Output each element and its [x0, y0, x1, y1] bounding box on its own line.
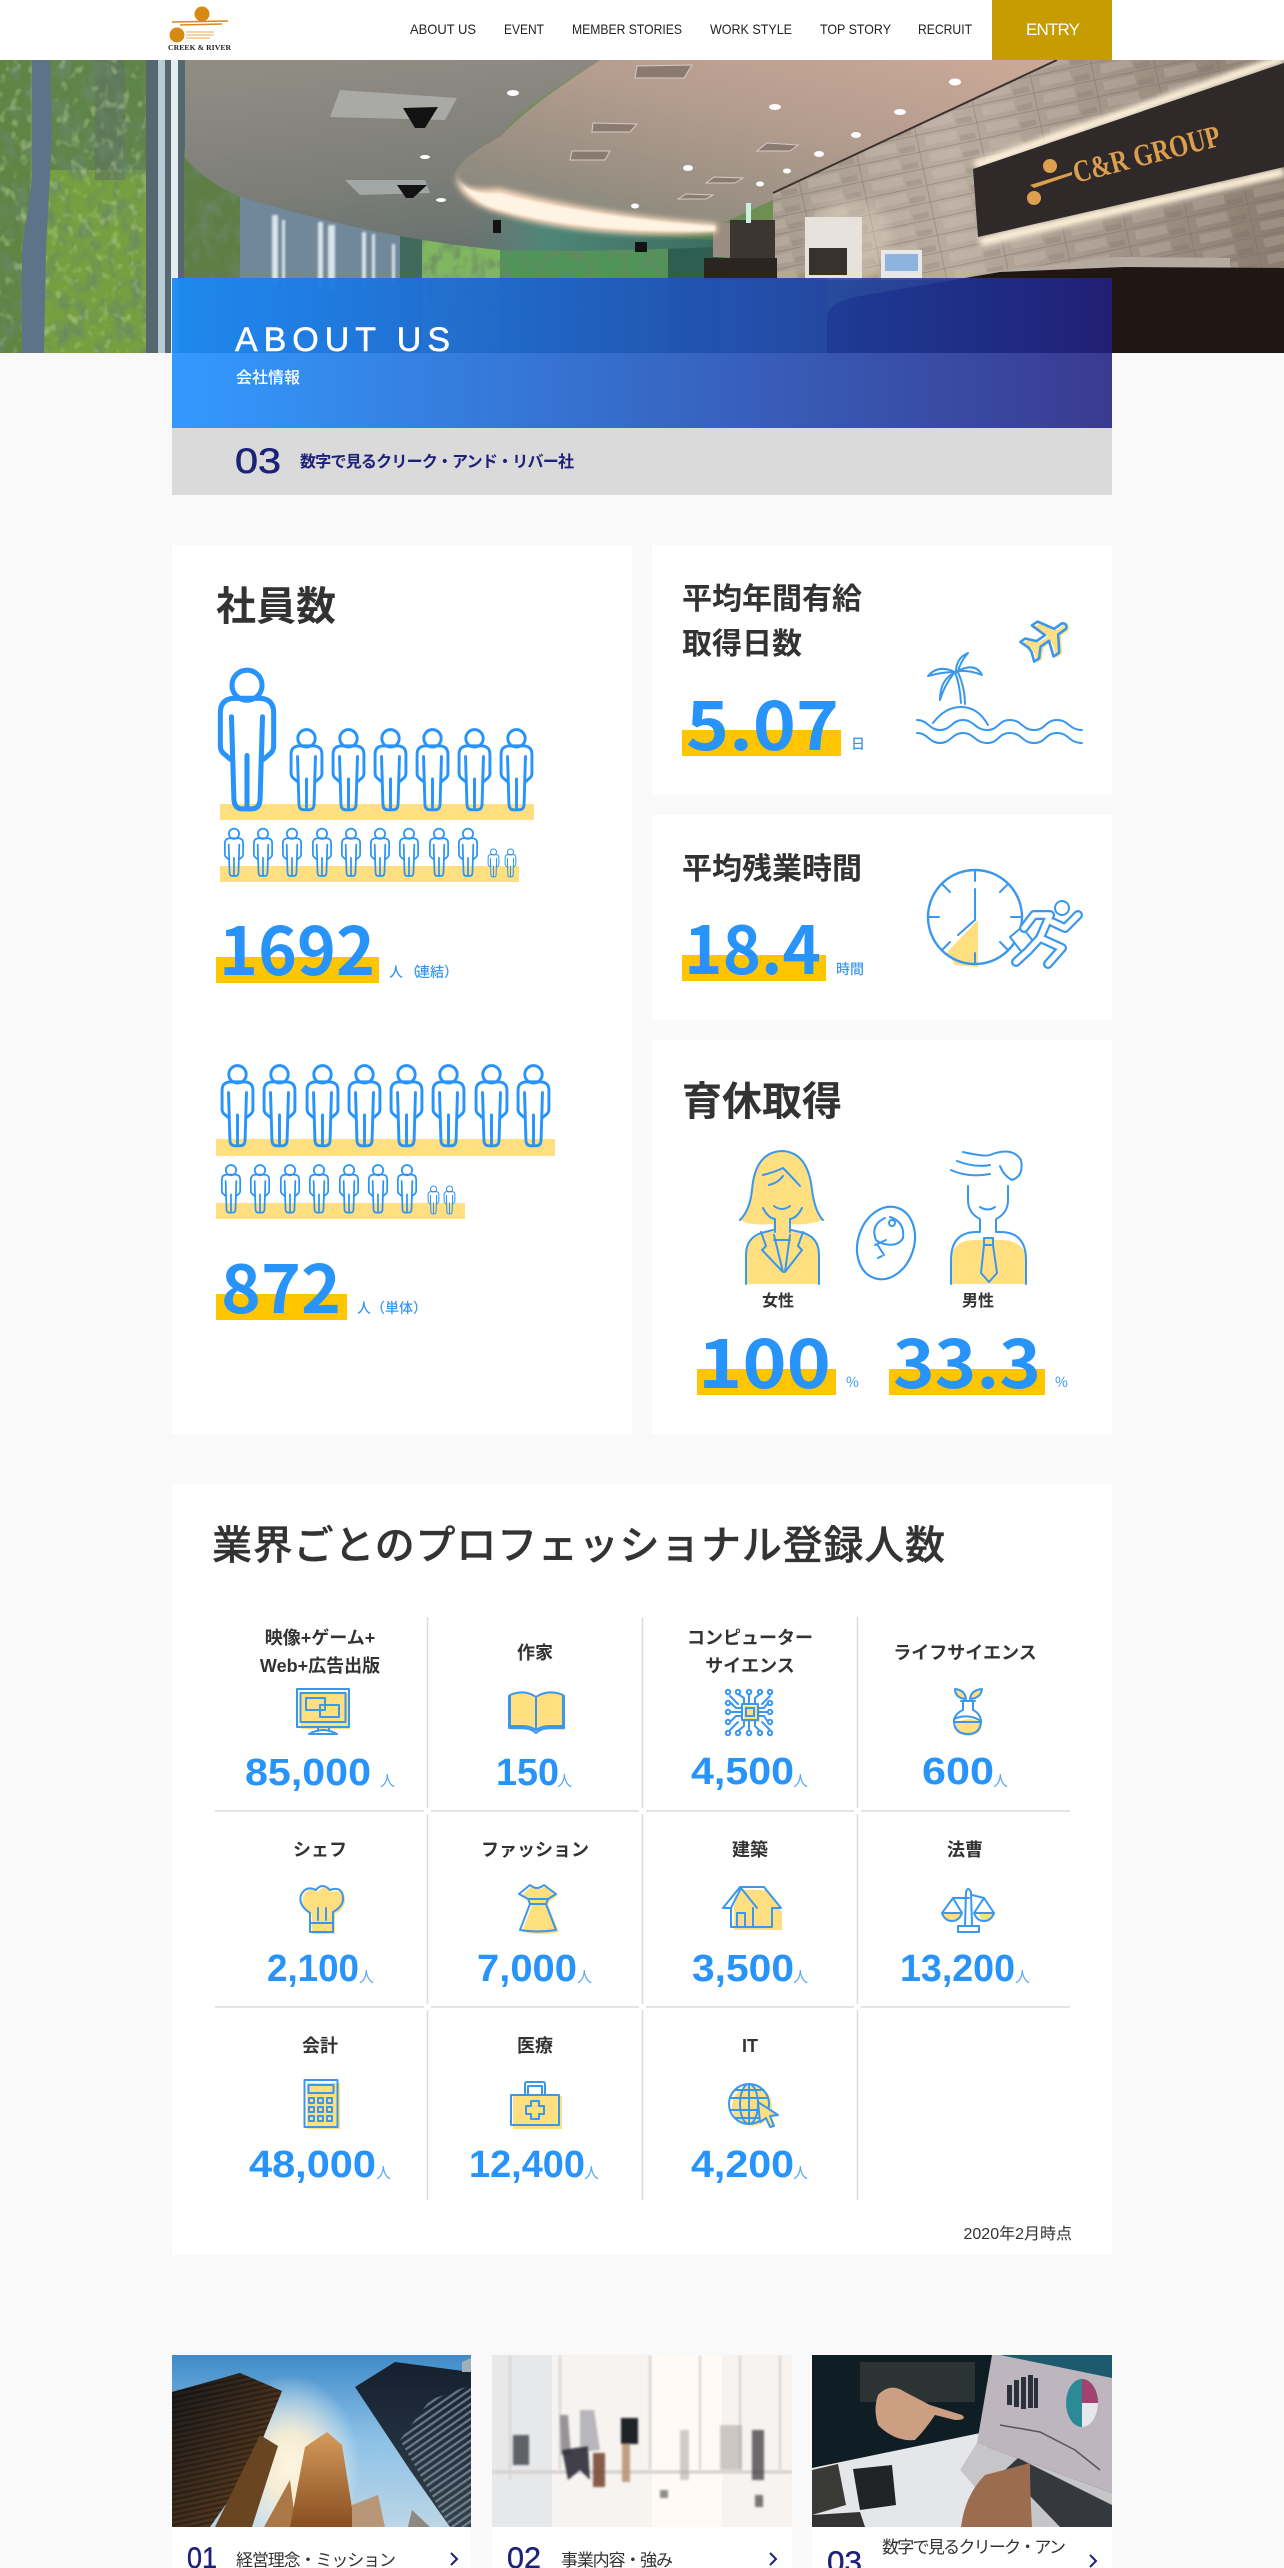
section breadcrumb bar — [172, 428, 1112, 495]
heading: 平均残業時間 — [682, 844, 862, 888]
pictogram: consolidated employees — [220, 670, 534, 882]
navigation: RECRUIT — [918, 21, 972, 37]
header bar — [0, 0, 1284, 60]
cell: computer science — [687, 1628, 813, 1793]
stat: women 100%: 100 — [698, 1312, 831, 1408]
cell: life science: 人 — [993, 1770, 1008, 1791]
cell: life science: ライフサイエンス — [893, 1643, 1037, 1663]
icon: medical kit — [511, 2082, 562, 2129]
cell: fashion: ファッション — [481, 1840, 589, 1860]
entry button — [992, 0, 1112, 60]
icon: house — [723, 1887, 782, 1930]
cell: writers — [496, 1643, 572, 1794]
icon: dress — [519, 1885, 559, 1934]
panel: employee count — [172, 545, 632, 1434]
subtitle: 会社情報 — [236, 364, 300, 388]
section name: 数字で見るクリーク・アンド・リバー社 — [300, 448, 574, 472]
cell: media: 映像+ゲーム+ — [265, 1628, 375, 1648]
cell: legal: 人 — [1015, 1966, 1030, 1987]
cell: writers: 150 — [496, 1752, 559, 1794]
panel: overtime — [652, 815, 1112, 1020]
cell: medical: 人 — [584, 2162, 599, 2183]
cell: chef: 2,100 — [267, 1948, 359, 1990]
cell: chef: 人 — [359, 1966, 374, 1987]
stat: 18.4 hours: 時間 — [836, 959, 864, 979]
heading: 社員数 — [216, 574, 336, 632]
lobby stone wall — [773, 60, 1284, 280]
label: women: 女性 — [762, 1291, 794, 1310]
card: 01 philosophy — [172, 2355, 471, 2568]
heading: 取得日数 — [682, 619, 802, 663]
heading: 業界ごとのプロフェッショナル登録人数 — [212, 1513, 945, 1571]
icon: chef hat — [300, 1886, 345, 1934]
reception desk — [974, 257, 1230, 274]
sign text: C&R GROUP — [1069, 118, 1224, 190]
icon: book — [509, 1692, 565, 1733]
icon: flask — [954, 1689, 982, 1736]
cell: computer science: 人 — [793, 1770, 808, 1791]
stat: 1692 consolidated — [216, 899, 458, 995]
panel: paid leave — [652, 545, 1112, 795]
cell: accounting: 48,000 — [249, 2144, 376, 2186]
cell: computer science: コンピューター — [687, 1628, 813, 1648]
pictogram: non-consolidated employees — [216, 1066, 555, 1219]
photo: laptop and charts — [812, 2355, 1112, 2527]
stat: 872 non-consolidated: 人（単体） — [357, 1298, 427, 1318]
hero photo: lobby with waterfall wall — [0, 58, 1284, 355]
entry button: ENTRY — [1026, 20, 1080, 39]
cell: accounting: 会計 — [302, 2036, 338, 2056]
cell: medical — [469, 2036, 599, 2186]
cell: life science: 600 — [922, 1751, 994, 1793]
stat: 872 non-consolidated — [216, 1237, 427, 1333]
photo: people in lobby — [492, 2355, 792, 2527]
cell: IT — [691, 2036, 808, 2186]
cell: IT: 人 — [793, 2162, 808, 2183]
cell: fashion: 7,000 — [477, 1948, 577, 1990]
logo: CREEK & RIVER — [168, 43, 232, 52]
ceiling: grey — [185, 60, 713, 251]
cell: chef: シェフ — [293, 1840, 347, 1860]
card: 02 business — [492, 2355, 792, 2568]
date note: 2020年2月時点 — [964, 2225, 1072, 2243]
cell: architecture: 3,500 — [692, 1948, 794, 1990]
cell: life science — [893, 1643, 1037, 1793]
panel: professional registrations — [172, 1484, 1112, 2255]
icon: globe and cursor — [729, 2084, 778, 2127]
heading: 育休取得 — [682, 1069, 842, 1127]
cell: fashion: 人 — [577, 1966, 592, 1987]
navigation — [410, 21, 972, 37]
icon: clock and runner — [928, 870, 1078, 967]
card title: 数字で見るクリーク・アン — [882, 2533, 1066, 2558]
icon: woman — [740, 1151, 823, 1284]
stat: 1692 consolidated: 人（連結） — [389, 962, 458, 982]
stat: men 33.3%: 33.3 — [893, 1312, 1041, 1408]
cell: writers: 人 — [557, 1770, 572, 1791]
cell: medical: 医療 — [517, 2036, 553, 2056]
navigation: TOP STORY — [820, 21, 892, 37]
photo: skyscrapers — [172, 2355, 471, 2527]
cell: accounting: 人 — [376, 2162, 391, 2183]
navigation: ABOUT US — [410, 21, 476, 37]
cell: chef — [267, 1840, 374, 1990]
cell: fashion — [477, 1840, 592, 1990]
icon: chip — [726, 1690, 772, 1735]
panel: childcare leave — [652, 1040, 1112, 1434]
stat: 872 non-consolidated: 872 — [221, 1237, 341, 1333]
cell: IT: IT — [742, 2036, 758, 2056]
cell: legal: 13,200 — [900, 1948, 1015, 1990]
cell: accounting — [249, 2036, 391, 2186]
cell: media — [245, 1628, 395, 1794]
arrow — [451, 2553, 457, 2565]
sign logo — [1027, 159, 1072, 205]
label: men: 男性 — [962, 1291, 994, 1310]
stat: 18.4 hours: 18.4 — [684, 898, 821, 994]
cell: architecture: 建築 — [732, 1839, 768, 1860]
icon: monitor — [297, 1689, 350, 1734]
sign board — [975, 58, 1284, 242]
heading: 平均年間有給 — [682, 574, 862, 618]
ceiling: beige — [455, 60, 1057, 230]
stat: 5.07 days: 5.07 — [686, 674, 839, 770]
cell: legal: 法曹 — [947, 1840, 983, 1860]
navigation: EVENT — [504, 21, 544, 37]
page title panel — [172, 278, 1112, 428]
icon: scales — [942, 1889, 995, 1932]
stat: women 100%: % — [846, 1372, 859, 1392]
stat: men 33.3%: % — [1055, 1372, 1068, 1392]
icon: man — [951, 1151, 1026, 1284]
cell: architecture — [692, 1839, 808, 1990]
cell: architecture: 人 — [793, 1966, 808, 1987]
stat: 5.07 days: 日 — [851, 734, 865, 754]
cell: IT: 4,200 — [691, 2144, 794, 2186]
cell: writers: 作家 — [517, 1643, 553, 1663]
cell: computer science: 4,500 — [691, 1751, 794, 1793]
cell: media: 人 — [380, 1770, 395, 1791]
icon: calculator — [304, 2080, 340, 2129]
arrow — [1090, 2555, 1096, 2567]
cell: media: 85,000 — [245, 1752, 371, 1794]
navigation: WORK STYLE — [710, 21, 792, 37]
cell: legal — [900, 1840, 1030, 1990]
icon: island and plane — [917, 608, 1082, 743]
cell: computer science: サイエンス — [705, 1656, 795, 1676]
icon: baby — [848, 1199, 924, 1287]
section number: 03 — [235, 442, 281, 481]
cell: medical: 12,400 — [469, 2144, 585, 2186]
stat: 1692 consolidated: 1692 — [219, 899, 375, 995]
logo — [168, 6, 232, 52]
navigation: MEMBER STORIES — [572, 21, 682, 37]
card: 03 numbers — [812, 2355, 1112, 2568]
cell: media: Web+広告出版 — [260, 1656, 380, 1676]
arrow — [770, 2553, 776, 2565]
title: about us: ABOUT US — [235, 321, 450, 359]
